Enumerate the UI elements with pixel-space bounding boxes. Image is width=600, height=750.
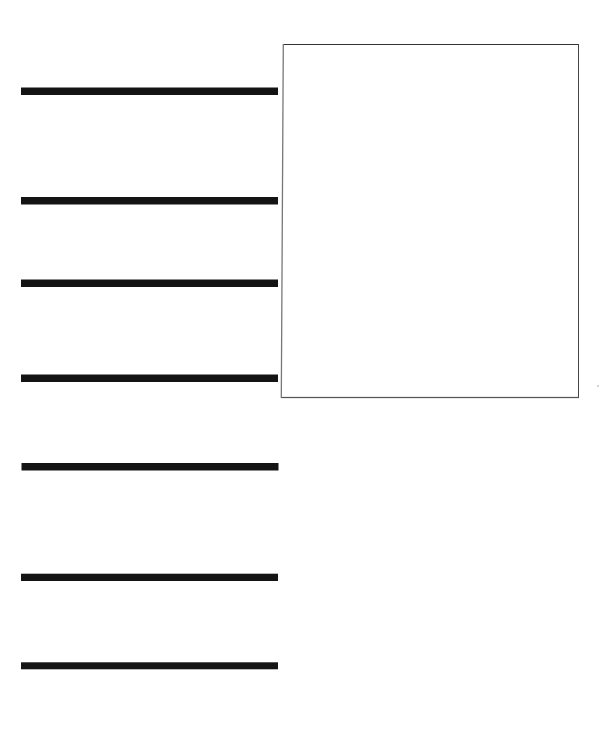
bar: section rule 2	[21, 197, 278, 204]
bar: section rule 7	[21, 662, 278, 669]
bar: section rule 4	[21, 374, 278, 382]
bar: section rule 6	[21, 574, 278, 581]
bar: section rule 5	[22, 463, 278, 470]
panel: empty framed box	[281, 44, 579, 398]
bar: section rule 3	[21, 280, 278, 287]
bar: section rule 1	[21, 88, 278, 95]
speck: scan mark at right edge	[597, 386, 599, 387]
